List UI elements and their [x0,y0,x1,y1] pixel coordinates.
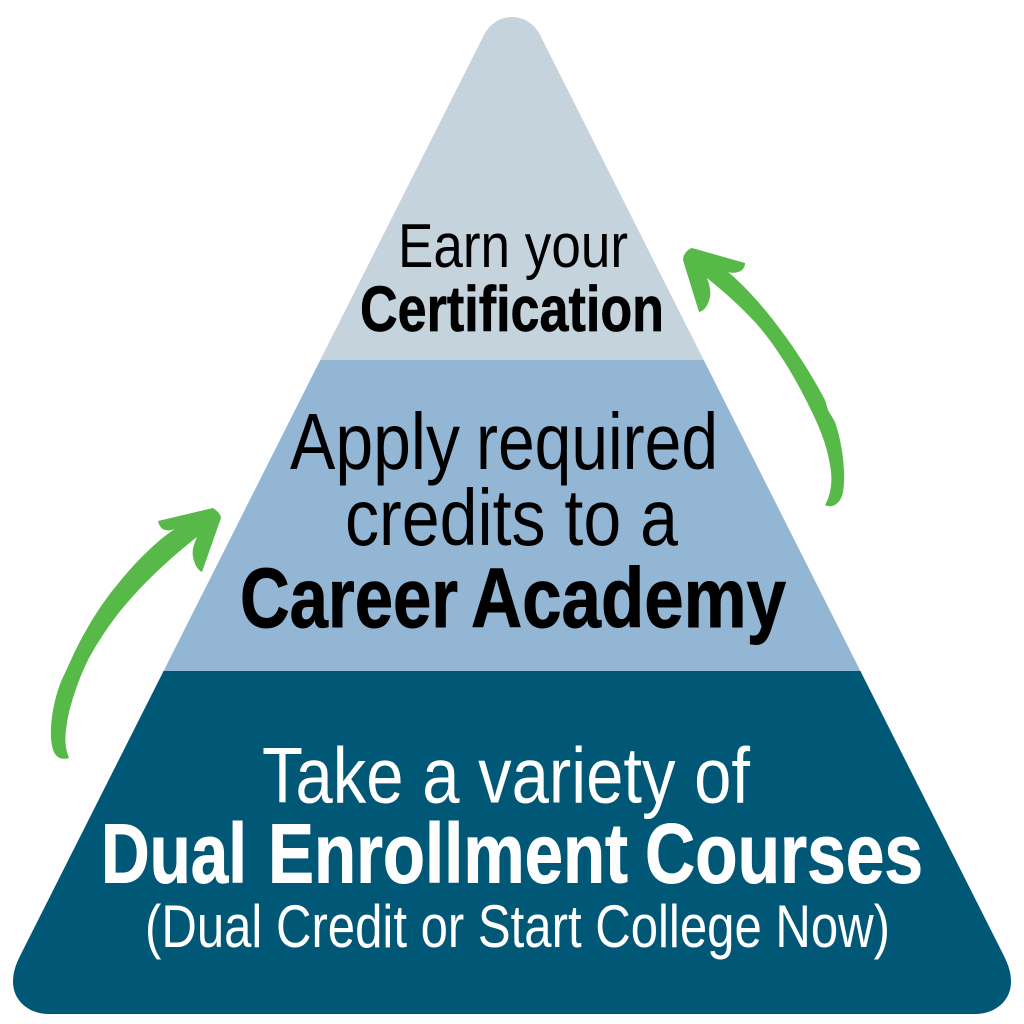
tier: bottom, dual enrollment [0,671,1024,1024]
arrow: right, up to certification [683,248,844,506]
text: middle tier: Career [240,551,458,645]
text: bottom tier: Courses [645,806,923,900]
tier: top, certification [320,17,704,360]
text: middle tier: Academy [471,551,786,645]
text: bottom tier: Take a variety of [262,730,751,820]
text: middle tier [240,397,786,645]
text: bottom tier [101,730,923,960]
arrow: left, up to career academy [51,508,221,759]
text: middle tier: Apply [290,397,460,486]
tier: middle, career academy [164,360,860,671]
text: middle tier: credits to a [345,473,678,562]
text: bottom tier: Enrollment [268,806,628,900]
text: bottom tier: Dual [101,806,247,900]
text: top tier: Certification [360,273,664,345]
text: top tier [360,212,664,345]
text: middle tier: required [476,397,718,486]
text: top tier: Earn your [398,212,628,281]
